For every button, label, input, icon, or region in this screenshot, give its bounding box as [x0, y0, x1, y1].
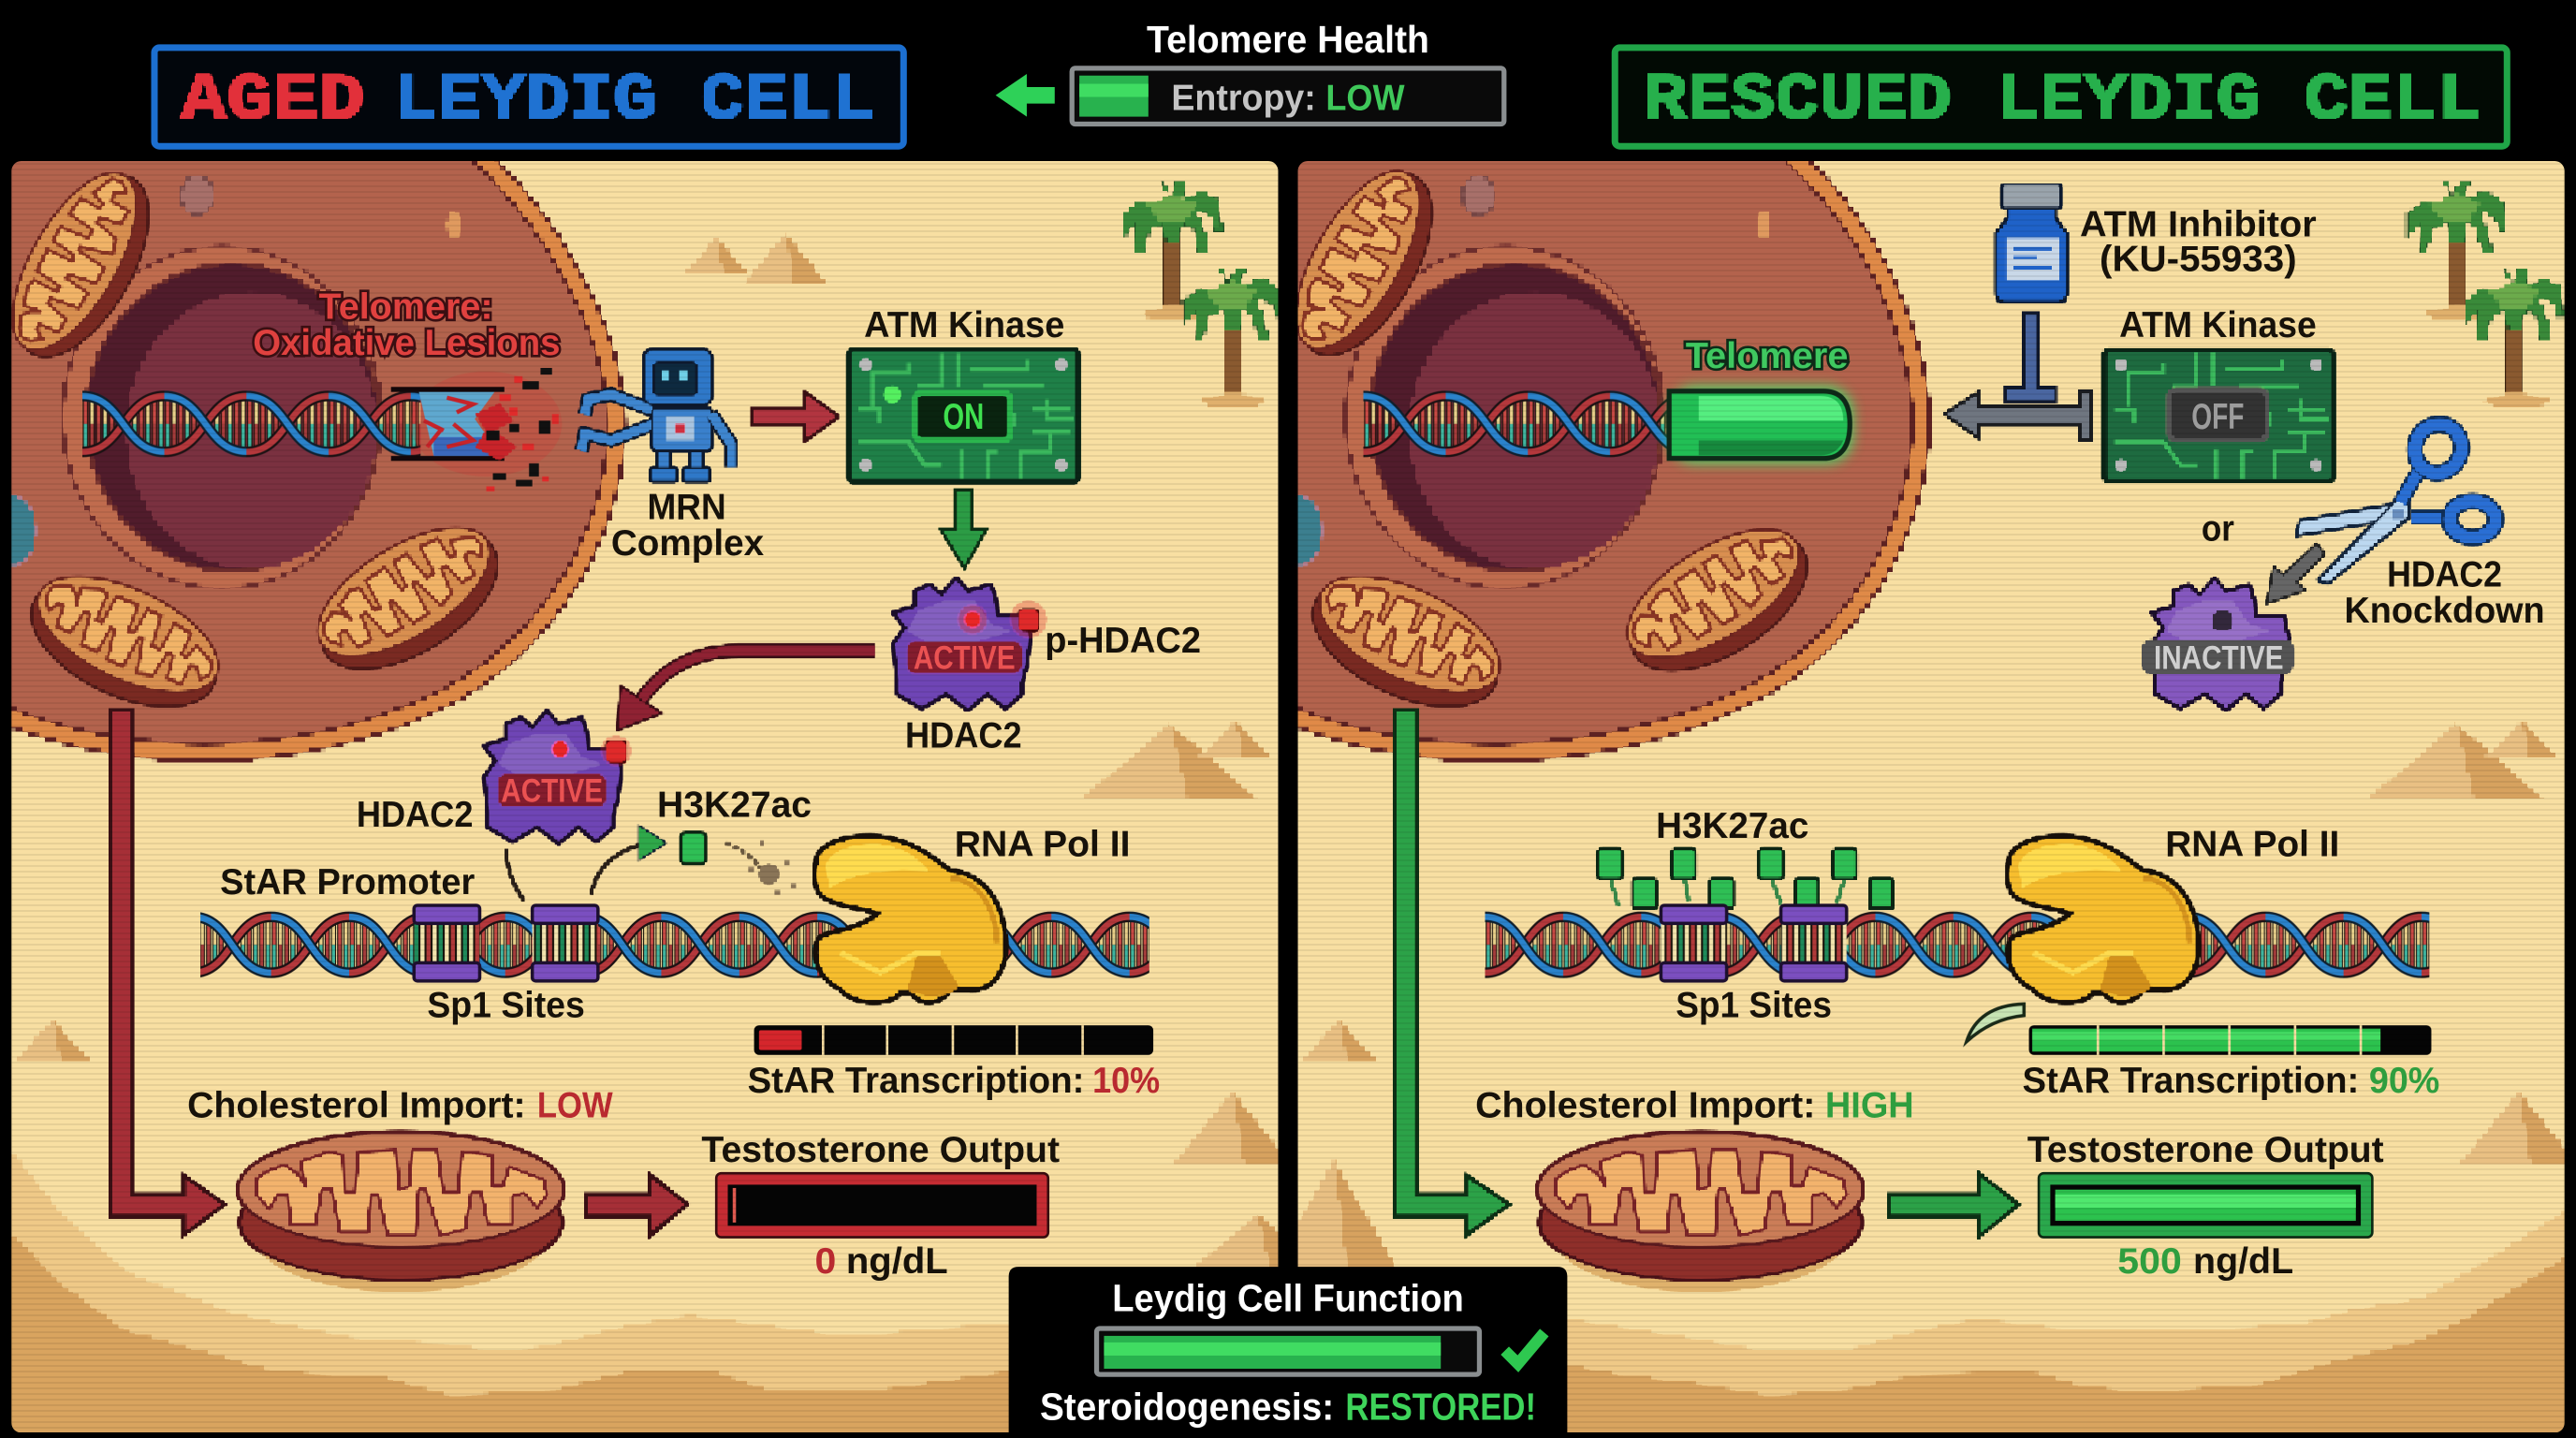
label: H3K27ac: H3K27ac	[1656, 806, 1808, 846]
label: HDAC2 bound: HDAC2	[357, 795, 473, 835]
telomere DNA	[1364, 388, 1701, 460]
label: cholesterol import high: Cholesterol Import:	[1475, 1085, 1815, 1125]
inhibition bar	[2006, 314, 2056, 401]
label: HDAC2 knockdown: HDAC2	[2387, 555, 2502, 595]
panel: Leydig cell function: RESTORED!	[1345, 1385, 1536, 1428]
arrow: ATM to HDAC2	[942, 490, 986, 567]
organelles	[0, 176, 460, 565]
status: INACTIVE: INACTIVE	[2154, 639, 2284, 676]
title: aged Leydig cell	[154, 48, 903, 146]
mitochondrion	[238, 1132, 564, 1292]
label: StAR transcription: StAR Transcription:	[748, 1061, 1084, 1101]
label: cholesterol import low: Cholesterol Import:	[187, 1085, 526, 1125]
label: MRN complex: MRN	[648, 488, 726, 528]
label: telomere: Telomere	[1686, 336, 1848, 376]
panel: Leydig cell function: Leydig Cell Function	[1112, 1277, 1464, 1320]
cell body	[0, 111, 616, 753]
value: 500 ng/dL	[2117, 1241, 2293, 1282]
label: HDAC2: HDAC2	[905, 716, 1022, 756]
mRNA strand	[1967, 1004, 2024, 1042]
title: rescued Leydig cell: RESCUED LEYDIG CELL	[1643, 65, 2481, 139]
panel: aged cell	[0, 111, 1321, 1432]
value: 500 ng/dL: ng/dL	[2193, 1241, 2293, 1282]
bar: StAR transcription 10%	[754, 1025, 1153, 1055]
label: StAR transcription: StAR Transcription:	[2023, 1061, 2359, 1101]
label: Sp1 sites: Sp1 Sites	[1676, 985, 1832, 1025]
label: H3K27ac: H3K27ac	[657, 785, 812, 825]
scanlines	[11, 161, 1278, 1432]
arrow: cholesterol into mitochondrion	[110, 710, 224, 1234]
label: cholesterol import low: LOW	[537, 1085, 613, 1125]
telomere health gauge: Entropy:	[1171, 79, 1316, 119]
label: RNA Pol II: RNA Pol II	[955, 824, 1131, 864]
mitochondria in cell	[1271, 152, 1830, 732]
nucleus	[63, 246, 381, 588]
value: 0 ng/dL: 0	[815, 1241, 836, 1282]
status: ACTIVE HDAC2: ACTIVE	[501, 772, 603, 809]
arrow: blocked signal	[1945, 391, 2091, 440]
healthy telomere cap	[1669, 386, 1853, 463]
label: HDAC2 knockdown: Knockdown	[2345, 591, 2545, 631]
telomere DNA	[82, 388, 420, 460]
label: testosterone output: Testosterone Output	[2027, 1130, 2384, 1170]
ATM chip: on	[849, 350, 1077, 481]
label: Sp1 sites: Sp1 Sites	[427, 985, 585, 1025]
icon: MRN complex robot	[581, 350, 731, 481]
pyramids	[1270, 720, 2576, 1269]
label: StAR promoter: StAR Promoter	[220, 862, 475, 902]
curved arrow: HDAC2 to nucleus promoter	[618, 651, 874, 729]
label: RNA Pol II: RNA Pol II	[2165, 824, 2339, 864]
RNA polymerase II	[2008, 836, 2198, 1002]
status: ON: ON	[943, 397, 984, 437]
histone acetylation marks	[1599, 849, 1893, 909]
damaged telomere end	[391, 368, 562, 492]
arrow: cholesterol into mitochondrion	[1395, 710, 1508, 1234]
enzyme: HDAC2 bound active	[485, 712, 631, 843]
value: 500 ng/dL: 500	[2117, 1241, 2182, 1282]
label: ATM kinase: ATM Kinase	[2119, 305, 2317, 345]
ATM chip: off	[2104, 350, 2333, 481]
arrow: mitochondrion to testosterone	[587, 1175, 687, 1236]
bar: StAR transcription 90%	[2029, 1025, 2432, 1055]
background art layer	[1253, 111, 2576, 1432]
panel: rescued cell	[1253, 111, 2576, 1432]
palm trees	[2407, 183, 2565, 408]
desert sand and dunes	[1298, 161, 2565, 1432]
StAR promoter DNA	[1486, 909, 2429, 981]
StAR promoter DNA	[200, 909, 1149, 981]
mitochondrion	[1538, 1132, 1863, 1292]
bar: testosterone 0	[716, 1173, 1048, 1238]
label: StAR transcription: 10%	[1092, 1061, 1160, 1101]
label: testosterone output: Testosterone Output	[701, 1130, 1060, 1170]
arrow: knockdown	[2267, 544, 2324, 603]
scanlines	[1298, 161, 2565, 1432]
desert sand and dunes	[11, 161, 1278, 1432]
status: ACTIVE p-HDAC2: ACTIVE	[914, 639, 1016, 676]
telomere health gauge: Telomere Health	[1147, 18, 1429, 61]
background art layer	[0, 111, 1321, 1432]
enzyme: p-HDAC2 active	[894, 579, 1046, 710]
nucleus	[1345, 246, 1664, 588]
telomere health gauge: LOW	[1325, 79, 1405, 119]
label: ATM kinase: ATM Kinase	[864, 305, 1064, 345]
enzyme: HDAC2 inactive	[2143, 579, 2293, 710]
arrow: MRN to ATM	[753, 392, 838, 440]
organelles	[1277, 176, 1771, 565]
value: 0 ng/dL: ng/dL	[846, 1241, 948, 1282]
label: or: or	[2202, 508, 2234, 549]
RNA polymerase II	[815, 836, 1005, 1002]
label: StAR transcription: 90%	[2369, 1061, 2439, 1101]
connector lines	[506, 844, 640, 901]
mitochondria in cell	[11, 172, 498, 708]
status: OFF: OFF	[2191, 397, 2244, 437]
label: telomere oxidative lesions: Telomere:	[318, 286, 493, 327]
label: MRN complex	[611, 488, 765, 564]
Sp1 sites	[414, 905, 598, 981]
Sp1 sites	[1661, 905, 1847, 981]
icon: ATM inhibitor bottle	[1996, 184, 2067, 302]
telomere health gauge	[996, 18, 1504, 125]
icon: acetyl mark removed	[639, 827, 795, 894]
cell body	[1253, 111, 1921, 753]
label: HDAC2 knockdown	[2345, 555, 2545, 631]
title: aged Leydig cell: LEYDIG CELL	[394, 65, 875, 139]
label: ATM inhibitor: ATM Inhibitor	[2080, 205, 2317, 245]
title: aged Leydig cell: AGED	[181, 65, 365, 139]
label: cholesterol import high: HIGH	[1825, 1085, 1914, 1125]
title: rescued Leydig cell	[1615, 48, 2507, 146]
bar: testosterone 500	[2039, 1173, 2372, 1238]
palm trees	[1123, 183, 1281, 408]
pyramids	[13, 232, 1321, 1269]
objects art layer	[485, 350, 1077, 901]
label: telomere oxidative lesions	[253, 286, 560, 363]
arrow: mitochondrion to testosterone	[1889, 1175, 2017, 1236]
label: p-HDAC2: p-HDAC2	[1045, 621, 1201, 661]
label: MRN complex: Complex	[611, 523, 765, 564]
panel: Leydig cell function: Steroidogenesis:	[1040, 1385, 1334, 1428]
panel: Leydig cell function	[1009, 1267, 1567, 1438]
icon: scissors	[2297, 417, 2496, 583]
label: ATM inhibitor: (KU-55933)	[2100, 240, 2297, 280]
objects art layer	[1599, 184, 2496, 909]
label: telomere oxidative lesions: Oxidative Lesions	[253, 323, 560, 363]
label: ATM inhibitor	[2080, 205, 2317, 280]
